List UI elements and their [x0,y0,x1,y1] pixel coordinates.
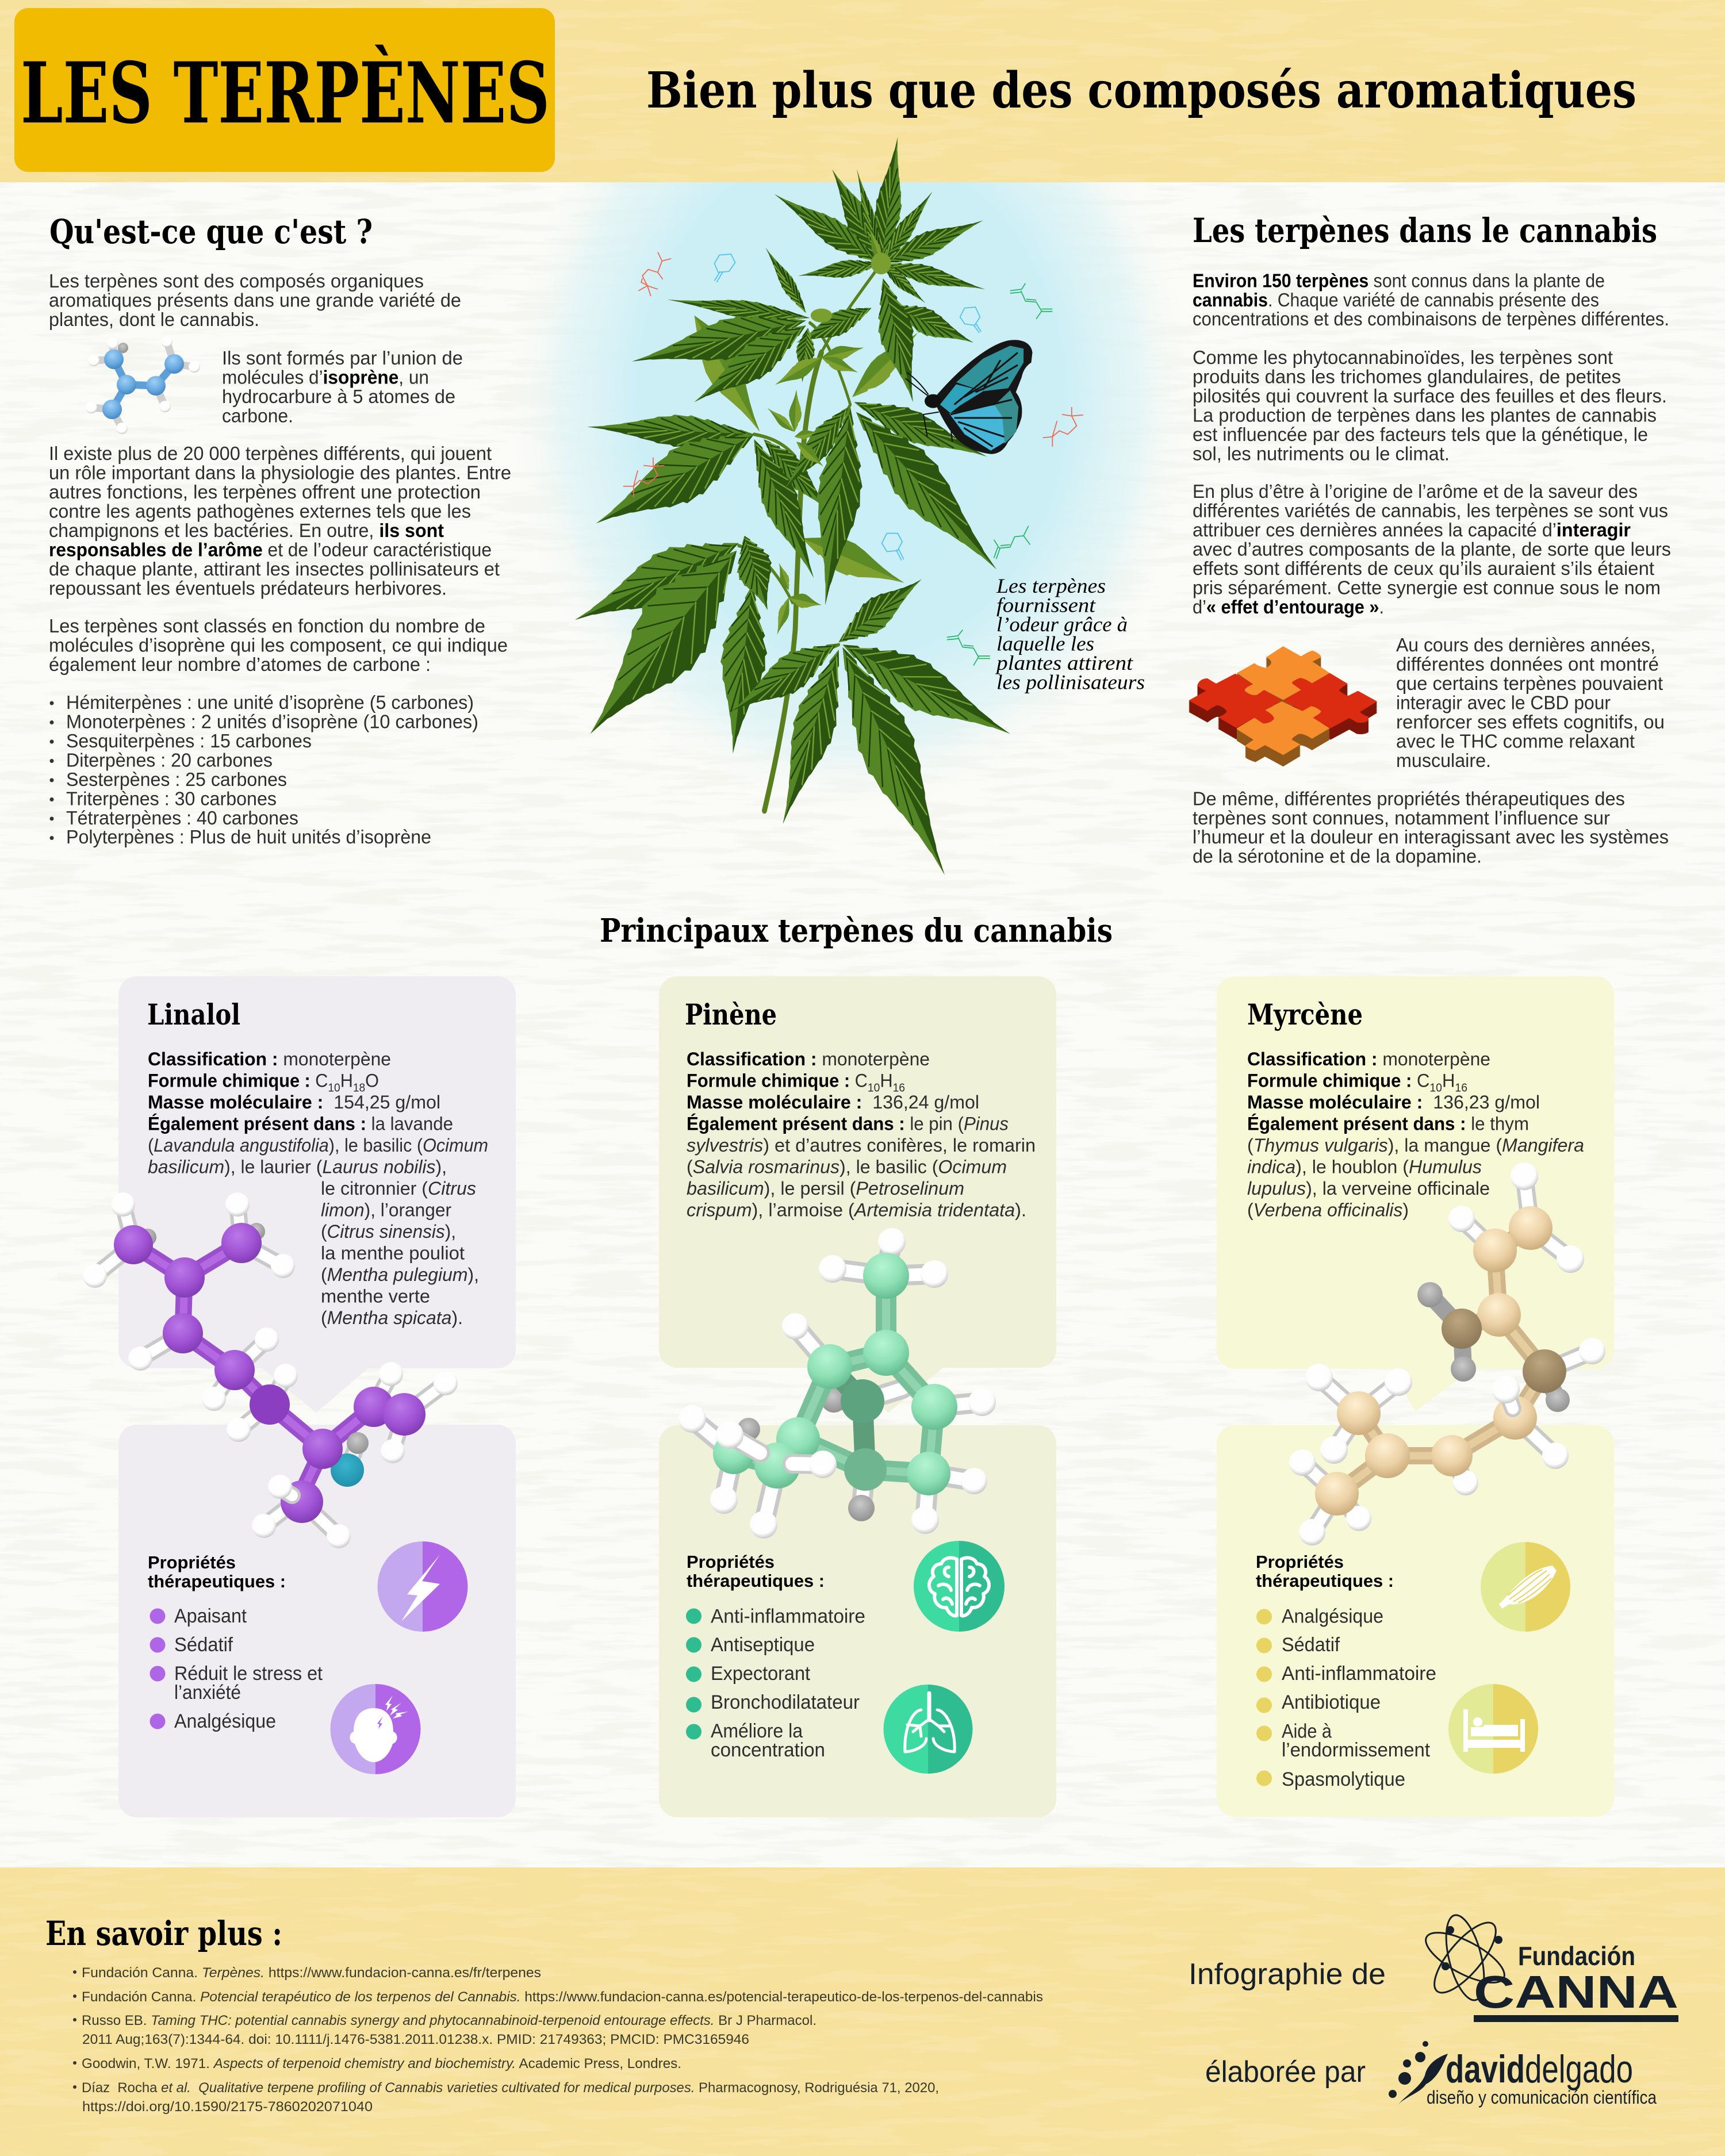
list: myrcene properties [1256,1605,1436,1790]
list: pinene properties: Expectorant [711,1663,811,1685]
logo: fundacion canna: CANNA [1474,1966,1678,2017]
text block: myrcene facts: indica), le houblon (Humulus [1247,1157,1482,1177]
references list: 2011 Aug;163(7):1344-64. doi: 10.1111/j.1476-5381.2011.01238.x. PMID: 21749363; PMCID: PMC3165946 [82,2032,749,2047]
footer band [0,1867,1725,2156]
heading: myrcene properties: thérapeutiques : [1256,1571,1394,1591]
heading: myrcene properties [1256,1552,1394,1591]
text block: linalol facts: H [340,1071,353,1091]
text block: linalol facts: (Mentha pulegium), [321,1264,479,1285]
illustration: cannabis plant [566,135,1083,892]
text block: entourage effect: effets sont différents de ceux qu’ils auraient s’ils étaient [1193,558,1654,579]
text block: myrcene facts: (Thymus vulgaris), la mangue (Mangifera [1247,1135,1584,1156]
text block: linalol facts [148,1049,488,1328]
text block: CBD and THC: que certains terpènes pouvaient [1396,673,1663,694]
text block: 150 terpenes [1193,270,1669,329]
text block: pinene facts [687,1049,1036,1220]
text block: pinene facts: 16 [893,1082,905,1095]
text block: pinene facts: crispum), l’armoise (Artemisia tridentata). [687,1199,1026,1220]
list: terpene types: Monoterpènes : 2 unités d’isoprène (10 carbones) [66,711,478,732]
heading: linalol: Linalol [147,998,240,1031]
text block: linalol facts: 10 [328,1082,340,1095]
list: linalol properties: l’anxiété [174,1682,241,1704]
text block: myrcene facts: H [1442,1071,1455,1091]
icon: headache [331,1684,421,1774]
text block: therapeutic properties: l’humeur et la douleur en interagissant avec les systèmes [1193,826,1669,847]
text block: intro: plantes, dont le cannabis. [49,309,259,330]
text block: myrcene facts: 10 [1429,1082,1442,1095]
list: linalol properties: Analgésique [174,1710,276,1732]
text block: 150 terpenes: Environ 150 terpènes sont connus dans la plante de [1193,270,1605,291]
text block: CBD and THC [1396,634,1665,771]
list: linalol properties: Réduit le stress et [174,1663,323,1685]
heading: qu'est-ce que c'est: Qu'est-ce que c'est ? [49,212,373,251]
text block: linalol facts: limon), l’oranger [321,1199,451,1220]
text block: entourage effect: avec d’autres composants de la plante, de sorte que leurs [1193,538,1671,560]
list: terpene types: Diterpènes : 20 carbones [66,750,273,770]
text block: myrcene facts: lupulus), la verveine officinale [1247,1178,1490,1199]
logo: david delgado: daviddelgado [1446,2047,1633,2091]
text block: linalol facts: (Lavandula angustifolia), le basilic (Ocimum [148,1135,488,1156]
molecule: myrcene [1289,1163,1605,1545]
list: pinene properties: Bronchodilatateur [711,1691,860,1713]
text block: plant physiology [49,443,511,599]
heading: main terpenes: Principaux terpènes du cannabis [600,912,1113,950]
text block: linalol facts: le citronnier (Citrus [321,1178,476,1199]
references list: Fundación Canna. Terpènes. https://www.fundacion-canna.es/fr/terpenes [82,1965,541,1981]
text block: intro: aromatiques présents dans une grande variété de [49,290,461,310]
list: terpene types: Sesterpènes : 25 carbones [66,769,287,790]
list: pinene properties: Anti-inflammatoire [711,1605,865,1627]
heading: pinene properties: thérapeutiques : [687,1571,825,1591]
blue glow behind plant [541,182,1162,774]
icon: lightning [377,1541,468,1632]
title box: LES TERPÈNES [21,44,550,143]
heading: linalol properties [148,1552,286,1591]
credit: made by: élaborée par [1205,2055,1366,2089]
text block: phytocannabinoids: sol, les nutriments ou le climat. [1193,443,1450,465]
panel: myrcene [1217,976,1614,1817]
references list: Díaz Rocha et al. Qualitative terpene profiling of Cannabis varieties cultivated for medical purposes. Pharmacognosy, Rodriguésia 71, 2020, [82,2080,939,2096]
text block: linalol facts: menthe verte [321,1286,430,1306]
text block: plant physiology: Il existe plus de 20 000 terpènes différents, qui jouent [49,443,492,464]
text block: plant physiology: autres fonctions, les terpènes offrent une protection [49,481,481,502]
card background: myrcene [1217,976,1614,1817]
caption: pollinators: l’odeur grâce à [996,613,1128,636]
panel: pinene [659,976,1056,1817]
caption: pollinators: Les terpènes [996,574,1106,597]
text block: linalol facts: (Citrus sinensis), [321,1221,456,1242]
text block: plant physiology: repoussant les éventuels prédateurs herbivores. [49,577,447,599]
logo: david delgado [1389,2041,1657,2108]
list: linalol properties: Apaisant [174,1605,247,1627]
heading: myrcene: Myrcène [1247,998,1363,1031]
card background: pinene [659,976,1056,1817]
caption: pollinators [995,574,1145,693]
text block: myrcene facts: Classification : monoterpène [1247,1049,1490,1069]
text block: pinene facts: Masse moléculaire : 136,24 g/mol [687,1092,979,1112]
text block: CBD and THC: renforcer ses effets cognitifs, ou [1396,711,1665,732]
list: myrcene properties: l’endormissement [1282,1739,1431,1761]
caption: pollinators: laquelle les [996,632,1094,655]
logo: david delgado: diseño y comunicación científica [1427,2087,1657,2108]
text block: classification [49,615,508,675]
text block: phytocannabinoids: pilosités qui couvrent la surface des feuilles et des fleurs. [1193,385,1667,406]
text block: entourage effect: pris séparément. Cette synergie est connue sous le nom [1193,577,1661,598]
list: terpene types: Sesquiterpènes : 15 carbones [66,730,312,751]
plant stems [739,263,881,811]
list: pinene properties: concentration [711,1739,825,1761]
heading: pinene properties: Propriétés [687,1552,775,1572]
text block: pinene facts: sylvestris) et d’autres conifères, le romarin [687,1135,1036,1156]
icon: muscle [1481,1542,1570,1632]
text block: classification: Les terpènes sont classés en fonction du nombre de [49,615,485,636]
text block: classification: molécules d’isoprène qui les composent, ce qui indique [49,635,508,655]
list: pinene properties [686,1605,865,1761]
text block: CBD and THC: interagir avec le CBD pour [1396,692,1611,713]
logo: fundacion canna: Fundación [1518,1941,1635,1971]
icon: brain [914,1541,1005,1632]
text block: therapeutic properties: De même, différentes propriétés thérapeutiques des [1193,788,1625,810]
text block: myrcene facts: Masse moléculaire : 136,23 g/mol [1247,1092,1540,1112]
heading: pinene: Pinène [685,998,777,1031]
heading: en savoir plus: En savoir plus : [45,1914,282,1953]
text block: entourage effect: d’« effet d’entourage ». [1193,596,1384,617]
text block: entourage effect: différentes variétés de cannabis, les terpènes se sont vus [1193,500,1668,521]
text block: isoprene: Ils sont formés par l’union de [222,347,463,369]
text block: phytocannabinoids: Comme les phytocannabinoïdes, les terpènes sont [1193,347,1613,368]
list: terpene types [49,692,478,847]
text block: myrcene facts: Également présent dans : le thym [1247,1113,1529,1134]
references list: Goodwin, T.W. 1971. Aspects of terpenoid chemistry and biochemistry. Academic Press, Londres. [82,2056,681,2071]
text block: isoprene: molécules d’isoprène, un [222,367,429,388]
caption: pollinators: fournissent [996,593,1096,616]
list: terpene types: Hémiterpènes : une unité d’isoprène (5 carbones) [66,692,474,713]
list: terpene types: Polyterpènes : Plus de huit unités d’isoprène [66,826,431,847]
text block: pinene facts: Formule chimique : C [687,1071,868,1091]
terpene formula doodles [623,252,1083,665]
text block: pinene facts: Classification : monoterpène [687,1049,930,1069]
title box [14,8,555,172]
text block: therapeutic properties: terpènes sont connues, notamment l’influence sur [1193,807,1610,828]
text block: plant physiology: contre les agents pathogènes externes tels que les [49,500,471,522]
list: terpene types: Triterpènes : 30 carbones [66,788,277,810]
butterfly [906,340,1032,454]
text block: phytocannabinoids: La production de terpènes dans les plantes de cannabis [1193,405,1657,425]
text block: 150 terpenes: cannabis. Chaque variété de cannabis présente des [1193,289,1599,310]
references list: https://doi.org/10.1590/2175-7860202071040 [82,2099,373,2115]
text block: linalol facts: la menthe pouliot [321,1243,465,1264]
list: myrcene properties: Anti-inflammatoire [1282,1663,1436,1685]
text block: intro: Les terpènes sont des composés organiques [49,270,424,291]
text block: linalol facts: basilicum), le laurier (Laurus nobilis), [148,1157,447,1177]
text block: pinene facts: Également présent dans : le pin (Pinus [687,1113,1009,1134]
text block: linalol facts: Formule chimique : C [148,1071,329,1091]
text block: CBD and THC: différentes données ont montré [1396,653,1659,675]
list: myrcene properties: Antibiotique [1282,1691,1381,1713]
heading: linalol properties: Propriétés [148,1552,236,1572]
text block: linalol facts: Masse moléculaire : 154,25 g/mol [148,1092,440,1112]
text block: myrcene facts [1247,1049,1584,1220]
text block: classification: également leur nombre d’atomes de carbone : [49,654,431,675]
text block: intro [49,270,461,330]
references list: Russo EB. Taming THC: potential cannabis synergy and phytocannabinoid-terpenoid entourage effects. Br J Pharmacol. [82,2013,816,2028]
text block: pinene facts: basilicum), le persil (Petroselinum [687,1178,964,1199]
text block: CBD and THC: avec le THC comme relaxant [1396,730,1635,752]
credit: infographic by: Infographie de [1189,1958,1386,1991]
references list: Fundación Canna. Potencial terapéutico de los terpenos del Cannabis. https://www.fundacion-canna.es/potencial-terapeutico-de-los-terpenos-del-cannabis [82,1989,1043,2005]
text block: CBD and THC: Au cours des dernières années, [1396,634,1655,655]
molecule: pinene [678,1228,996,1539]
text block: pinene facts: H [880,1071,893,1091]
text block: pinene facts: 10 [868,1082,880,1095]
text block: entourage effect: En plus d’être à l’origine de l’arôme et de la saveur des [1193,481,1638,502]
text block: therapeutic properties: de la sérotonine et de la dopamine. [1193,845,1482,867]
list: myrcene properties: Analgésique [1282,1605,1383,1627]
list: myrcene properties: Spasmolytique [1282,1768,1405,1790]
text block: plant physiology: un rôle important dans la physiologie des plantes. Entre [49,462,511,483]
icon: lungs [883,1685,973,1774]
icon: bed [1448,1684,1538,1774]
text block: CBD and THC: musculaire. [1396,750,1491,771]
text block: entourage effect: attribuer ces dernières années la capacité d’interagir [1193,519,1631,540]
text block: pinene facts: (Salvia rosmarinus), le basilic (Ocimum [687,1157,1007,1177]
list: linalol properties [150,1605,323,1732]
heading: pinene properties [687,1552,825,1591]
references list [73,1965,1043,2115]
molecule: linalol [83,1192,458,1548]
text block: phytocannabinoids: produits dans les trichomes glandulaires, de petites [1193,366,1621,388]
panel: linalol [83,976,516,1817]
list: myrcene properties: Aide à [1282,1720,1332,1742]
icon: isoprene molecule [86,336,200,434]
text block: isoprene: carbone. [222,405,293,427]
text block: plant physiology: champignons et les bactéries. En outre, ils sont [49,520,444,541]
text block: entourage effect [1193,481,1671,617]
text block: linalol facts: (Mentha spicata). [321,1307,463,1328]
text block: myrcene facts: 16 [1455,1082,1467,1095]
text block: 150 terpenes: concentrations et des combinaisons de terpènes différentes. [1193,308,1669,329]
heading: myrcene properties: Propriétés [1256,1552,1344,1572]
text block: phytocannabinoids: est influencée par des facteurs tels que la génétique, le [1193,424,1648,445]
header band [0,0,1725,182]
text block: linalol facts: Classification : monoterpène [148,1049,391,1069]
text block: linalol facts: 18 [353,1082,365,1095]
list: pinene properties: Améliore la [711,1720,803,1742]
list: myrcene properties: Sédatif [1282,1634,1340,1656]
list: pinene properties: Antiseptique [711,1634,815,1656]
text block: isoprene [222,347,463,427]
text block: plant physiology: de chaque plante, attirant les insectes pollinisateurs et [49,558,500,580]
text block: linalol facts: Également présent dans : la lavande [148,1113,453,1134]
list: terpene types: Tétraterpènes : 40 carbones [66,807,298,828]
text block: myrcene facts: Formule chimique : C [1247,1071,1430,1091]
heading: linalol properties: thérapeutiques : [148,1571,286,1591]
card background: linalol [118,976,516,1817]
text block: linalol facts: O [365,1071,379,1091]
text block: plant physiology: responsables de l’arôme et de l’odeur caractéristique [49,539,492,560]
text block: isoprene: hydrocarbure à 5 atomes de [222,386,455,407]
icon: puzzle [1189,646,1377,766]
logo: fundacion canna [1419,1911,1678,2022]
text block: therapeutic properties [1193,788,1669,867]
caption: pollinators: plantes attirent [995,651,1133,674]
text block: phytocannabinoids [1193,347,1667,465]
plant leaves [566,135,1018,892]
list: linalol properties: Sédatif [174,1634,233,1656]
text block: myrcene facts: (Verbena officinalis) [1247,1199,1409,1220]
caption: pollinators: les pollinisateurs [996,670,1145,693]
